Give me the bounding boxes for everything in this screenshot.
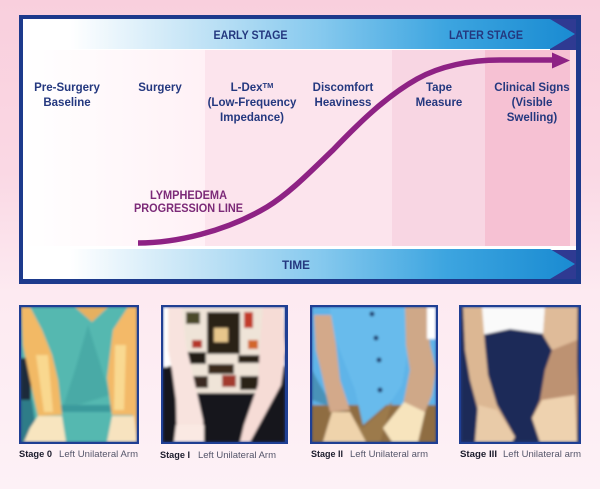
column label: pre-surgery baseline: Baseline: [43, 97, 91, 109]
label: later stage: LATER STAGE: [449, 30, 523, 42]
caption: stage II: Left Unilateral arm: [350, 449, 428, 460]
caption: stage I: Stage I: [160, 450, 190, 460]
caption: stage I: [160, 450, 276, 461]
photo: stage 0: [19, 305, 139, 444]
label: lymphedema progression line: LYMPHEDEMA: [150, 190, 227, 202]
caption: stage III: [460, 449, 581, 460]
stage background bands: [23, 50, 576, 246]
label: lymphedema progression line: [134, 190, 243, 215]
column label: L-Dex: L-Dex: [231, 82, 263, 94]
caption: stage II: Stage II: [311, 449, 343, 459]
photo: stage II: [310, 305, 438, 444]
caption: stage 0: Left Unilateral Arm: [59, 449, 138, 460]
label: time: TIME: [282, 260, 310, 272]
caption: stage III: Stage III: [460, 449, 497, 459]
column label: L-Dex: TM: [263, 81, 273, 90]
caption: stage II: [311, 449, 428, 460]
column label: discomfort heaviness: Discomfort: [313, 82, 373, 94]
caption: stage 0: [19, 449, 138, 460]
column label: tape measure: Measure: [416, 97, 462, 109]
label: early stage: EARLY STAGE: [214, 30, 288, 42]
lymphedema progression line: [138, 52, 570, 243]
panel: progression chart: [19, 15, 581, 284]
column label: tape measure: Tape: [426, 82, 452, 94]
photo: stage III: [459, 305, 581, 444]
column label: pre-surgery baseline: Pre-Surgery: [34, 82, 100, 94]
column label: surgery: Surgery: [138, 82, 182, 94]
label: lymphedema progression line: PROGRESSION LINE: [134, 203, 243, 215]
photo: stage I: [161, 305, 288, 444]
column label: L-Dex: (Low-Frequency: [208, 97, 297, 109]
top arrow: early to later stage: [23, 19, 576, 50]
caption: stage 0: Stage 0: [19, 449, 52, 459]
column label: clinical signs: Clinical Signs: [494, 82, 570, 94]
column label: discomfort heaviness: Heaviness: [315, 97, 371, 109]
column label: L-Dex: Impedance): [220, 112, 284, 124]
caption: stage I: Left Unilateral Arm: [198, 450, 276, 461]
caption: stage III: Left Unilateral arm: [503, 449, 581, 460]
column label: clinical signs: Swelling): [507, 112, 557, 124]
bottom arrow: time: [23, 249, 576, 279]
column label: clinical signs: (Visible: [512, 97, 552, 109]
